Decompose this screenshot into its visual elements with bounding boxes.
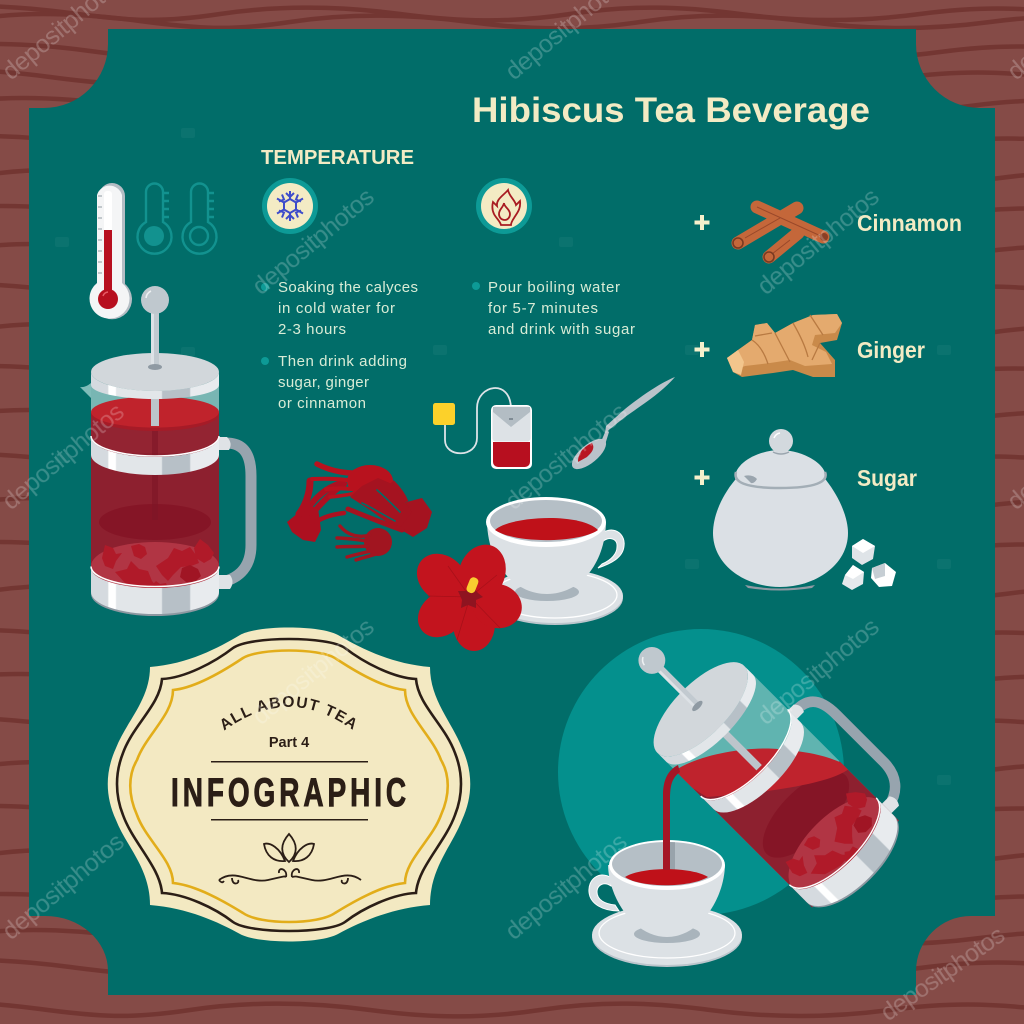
text block: hot method: and drink with sugar [488,321,635,338]
watermarks: depositphotos [247,613,380,731]
badge: all about tea infographic [108,628,470,942]
badge: all about tea infographic: Part 4 [269,735,309,751]
badge: all about tea infographic: INFOGRAPHIC [171,771,410,815]
icon: snowflake badge [262,178,318,234]
icon: thermometer cold outline [138,184,172,254]
text block: cold method: Soaking the calyces [278,279,418,296]
watermarks: depositphotos [875,921,1010,1024]
text block: cold method: Then drink adding [278,353,407,370]
text block: cold method: sugar, ginger [278,374,369,391]
spoon [567,377,675,474]
icon: ginger root [727,314,842,377]
teacup with saucer [486,497,624,625]
watermarks: depositphotos [0,828,130,946]
watermarks: depositphotos [752,183,885,301]
text block: cold method: in cold water for [278,300,395,317]
watermarks: depositphotos [500,828,633,946]
text block: hot method [472,279,635,338]
watermarks: depositphotos [500,398,633,516]
text block: hot method: for 5-7 minutes [488,300,598,317]
text block: cold method: or cinnamon [278,395,366,412]
text block: cold method: 2-3 hours [278,321,346,338]
icon: cinnamon sticks [733,207,828,262]
plus: sugar [694,470,710,485]
label: sugar: Sugar [857,465,917,491]
pouring tea stream [663,765,680,870]
french press upright [80,286,251,616]
label: ginger: Ginger [857,337,925,363]
heading: temperature: TEMPERATURE [261,147,414,169]
camera watermark marks [55,128,951,785]
badge: all about tea infographic: ALL ABOUT TEA [222,696,356,730]
label: cinnamon: Cinnamon [857,210,962,236]
hibiscus flower [407,538,527,651]
watermarks: depositphotos [0,398,130,516]
plus: ginger [694,342,710,357]
icon: flame badge [476,178,532,234]
french press tilted pouring [638,647,900,908]
watermarks: depositphotos [247,183,380,301]
tea bag [433,388,532,469]
watermarks: depositphotos [752,613,885,731]
dried hibiscus calyces [287,464,432,560]
pouring cup with saucer [589,838,742,967]
text block: cold method [261,279,418,412]
icon: thermometer empty outline [182,184,217,254]
icon: sugar bowl with cubes [713,429,896,590]
pour background circle [558,629,844,915]
icon: thermometer hot [90,183,132,319]
plus: cinnamon [694,215,710,230]
text block: hot method: Pour boiling water [488,279,620,296]
title: Hibiscus Tea Beverage [472,91,870,130]
